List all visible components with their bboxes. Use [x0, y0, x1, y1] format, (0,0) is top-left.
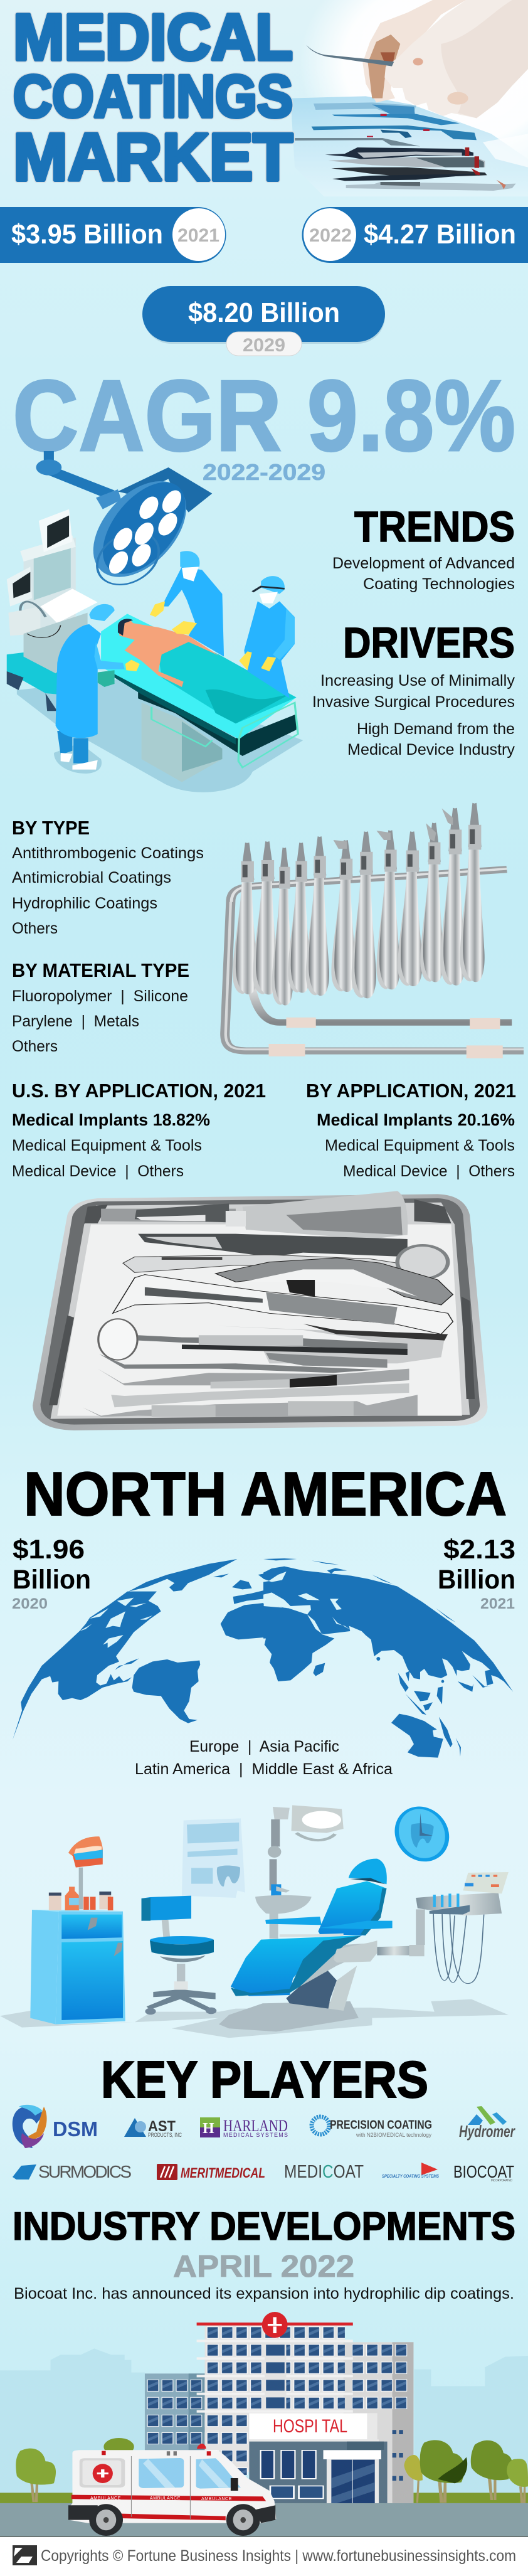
segmentation: U.S. by application: Medical Implants 18.82% — [12, 1110, 210, 1129]
title: Medical Coatings Market — [13, 1, 293, 194]
value band: 2022: 2022 — [309, 225, 352, 246]
trends: Coating Technologies — [363, 575, 515, 593]
stat: North America 2021: 2021 — [480, 1595, 515, 1612]
logo: Merit Medical: MERITMEDICAL — [181, 2165, 265, 2181]
segmentation: by material type: Parylene | Metals — [12, 1013, 139, 1030]
logo: AST Products: AST — [148, 2118, 176, 2135]
logo: Specialty Coating Systems — [382, 2163, 439, 2179]
segmentation: by type: Antimicrobial Coatings — [12, 869, 171, 886]
logo: Precision Coating: with N2BIOMEDICAL technology — [356, 2132, 431, 2138]
drivers: High Demand from the — [357, 720, 515, 738]
title: Medical Coatings Market: COATINGS — [13, 63, 293, 130]
ambulance lettering — [90, 2496, 232, 2501]
photo: pliers on rack — [225, 803, 524, 1058]
illustration: dental clinic — [0, 1805, 509, 2038]
value band: 2021 — [0, 207, 226, 263]
segmentation: by material type: Others — [12, 1038, 58, 1055]
segmentation: U.S. by application: Medical Equipment & Tools — [12, 1137, 202, 1154]
segmentation: global by application — [306, 1080, 516, 1180]
value band: 2021: 2021 — [177, 225, 219, 246]
stat: North America 2021: $2.13 — [443, 1535, 515, 1565]
segmentation: by type — [12, 817, 204, 937]
trends — [332, 503, 515, 593]
logo: Hydromer — [459, 2106, 515, 2141]
trends: Development of Advanced — [332, 555, 515, 572]
CAGR headline: 2022-2029 — [203, 459, 325, 485]
stat: North America 2020: 2020 — [12, 1595, 48, 1612]
logo: DSM — [13, 2105, 98, 2148]
illustration: hospital and ambulance — [0, 2312, 528, 2536]
drivers: Increasing Use of Minimally — [320, 672, 515, 689]
title: Medical Coatings Market: MARKET — [13, 119, 293, 194]
logo: MediCoat: MEDICOAT — [284, 2162, 364, 2182]
heading: Key Players: KEY PLAYERS — [101, 2050, 428, 2109]
logo: Harland Medical Systems: MEDICAL SYSTEMS — [223, 2132, 288, 2138]
segmentation: global by application: Medical Implants 20.16% — [317, 1110, 515, 1129]
stat: North America 2020 — [12, 1535, 91, 1612]
title: Medical Coatings Market: MEDICAL — [13, 1, 293, 74]
logo: Biocoat: INCORPORATED — [491, 2179, 512, 2183]
development description: Biocoat Inc. has announced its expansion into hydrophilic dip coatings. — [14, 2285, 514, 2302]
logo: Specialty Coating Systems: SPECIALTY COATING SYSTEMS — [382, 2174, 439, 2179]
footer — [0, 2536, 528, 2576]
ambulance lettering: AMBULANCE — [201, 2497, 232, 2501]
trends: TRENDS — [354, 503, 515, 551]
stat: North America 2020: Billion — [13, 1565, 91, 1595]
segmentation: global by application: Medical Device | Others — [343, 1163, 515, 1180]
stat: North America 2021: Billion — [438, 1565, 515, 1595]
world map — [13, 1558, 513, 1758]
photo: steel tray of dental instruments — [33, 1191, 488, 1430]
other regions list — [135, 1738, 393, 1778]
segmentation: global by application: BY APPLICATION, 2021 — [306, 1080, 516, 1102]
logos: key players — [13, 2105, 515, 2183]
illustration: operating room — [7, 451, 303, 792]
title: Medical Coatings Market: MARKET — [13, 119, 293, 194]
stat: North America 2020: $1.96 — [13, 1535, 85, 1565]
logo: DSM: DSM — [53, 2117, 98, 2141]
segmentation: U.S. by application — [12, 1080, 266, 1180]
hospital sign: HOSPI TAL — [273, 2416, 347, 2437]
ambulance lettering: AMBULANCE — [150, 2496, 181, 2501]
logo: AST Products: PRODUCTS, INC — [148, 2132, 182, 2138]
drivers — [312, 619, 515, 758]
drivers: Invasive Surgical Procedures — [312, 693, 515, 711]
hero photo: gloved hands and surgical tools — [290, 0, 528, 196]
segmentation: U.S. by application: U.S. BY APPLICATION, 2021 — [12, 1080, 266, 1102]
logo: Harland Medical Systems: HARLAND — [223, 2117, 288, 2135]
value band: 2022 — [302, 207, 528, 263]
segmentation: by type: Antithrombogenic Coatings — [12, 844, 204, 862]
logo: Surmodics: SURMODICS — [38, 2162, 132, 2181]
value pill: 2029 — [142, 286, 385, 356]
segmentation: by material type: BY MATERIAL TYPE — [12, 959, 189, 981]
logo: Precision Coating — [312, 2117, 432, 2138]
logo: Merit Medical — [157, 2164, 265, 2181]
segmentation: global by application: Medical Equipment & Tools — [325, 1137, 515, 1154]
value band: 2022: $4.27 Billion — [364, 219, 516, 250]
segmentation: by type: Hydrophilic Coatings — [12, 895, 157, 912]
segmentation: U.S. by application: Medical Device | Others — [12, 1163, 184, 1180]
title: Medical Coatings Market: COATINGS — [13, 63, 293, 130]
title: Medical Coatings Market: MEDICAL — [13, 1, 293, 74]
value band: 2021: $3.95 Billion — [11, 219, 163, 250]
segmentation: by material type — [12, 959, 189, 1055]
segmentation: by material type: Fluoropolymer | Silicone — [12, 987, 188, 1005]
other regions list: Latin America | Middle East & Africa — [135, 1760, 393, 1778]
value pill: 2029: $8.20 Billion — [188, 297, 340, 328]
logo: Fortune Business Insights — [13, 2545, 37, 2565]
ambulance lettering: AMBULANCE — [90, 2496, 121, 2501]
logo: Harland Medical Systems — [200, 2117, 288, 2138]
logo: Precision Coating: PRECISION COATING — [330, 2119, 432, 2132]
other regions list: Europe | Asia Pacific — [189, 1738, 339, 1755]
segmentation: by type: BY TYPE — [12, 817, 90, 839]
value pill: 2029: 2029 — [243, 335, 285, 356]
segmentation: by type: Others — [12, 920, 58, 937]
logo: AST Products — [124, 2118, 182, 2138]
drivers: Medical Device Industry — [347, 741, 515, 758]
stat: North America 2021 — [438, 1535, 515, 1612]
logo: Harland Medical Systems: H — [203, 2121, 214, 2137]
date: April 2022: APRIL 2022 — [173, 2250, 354, 2284]
